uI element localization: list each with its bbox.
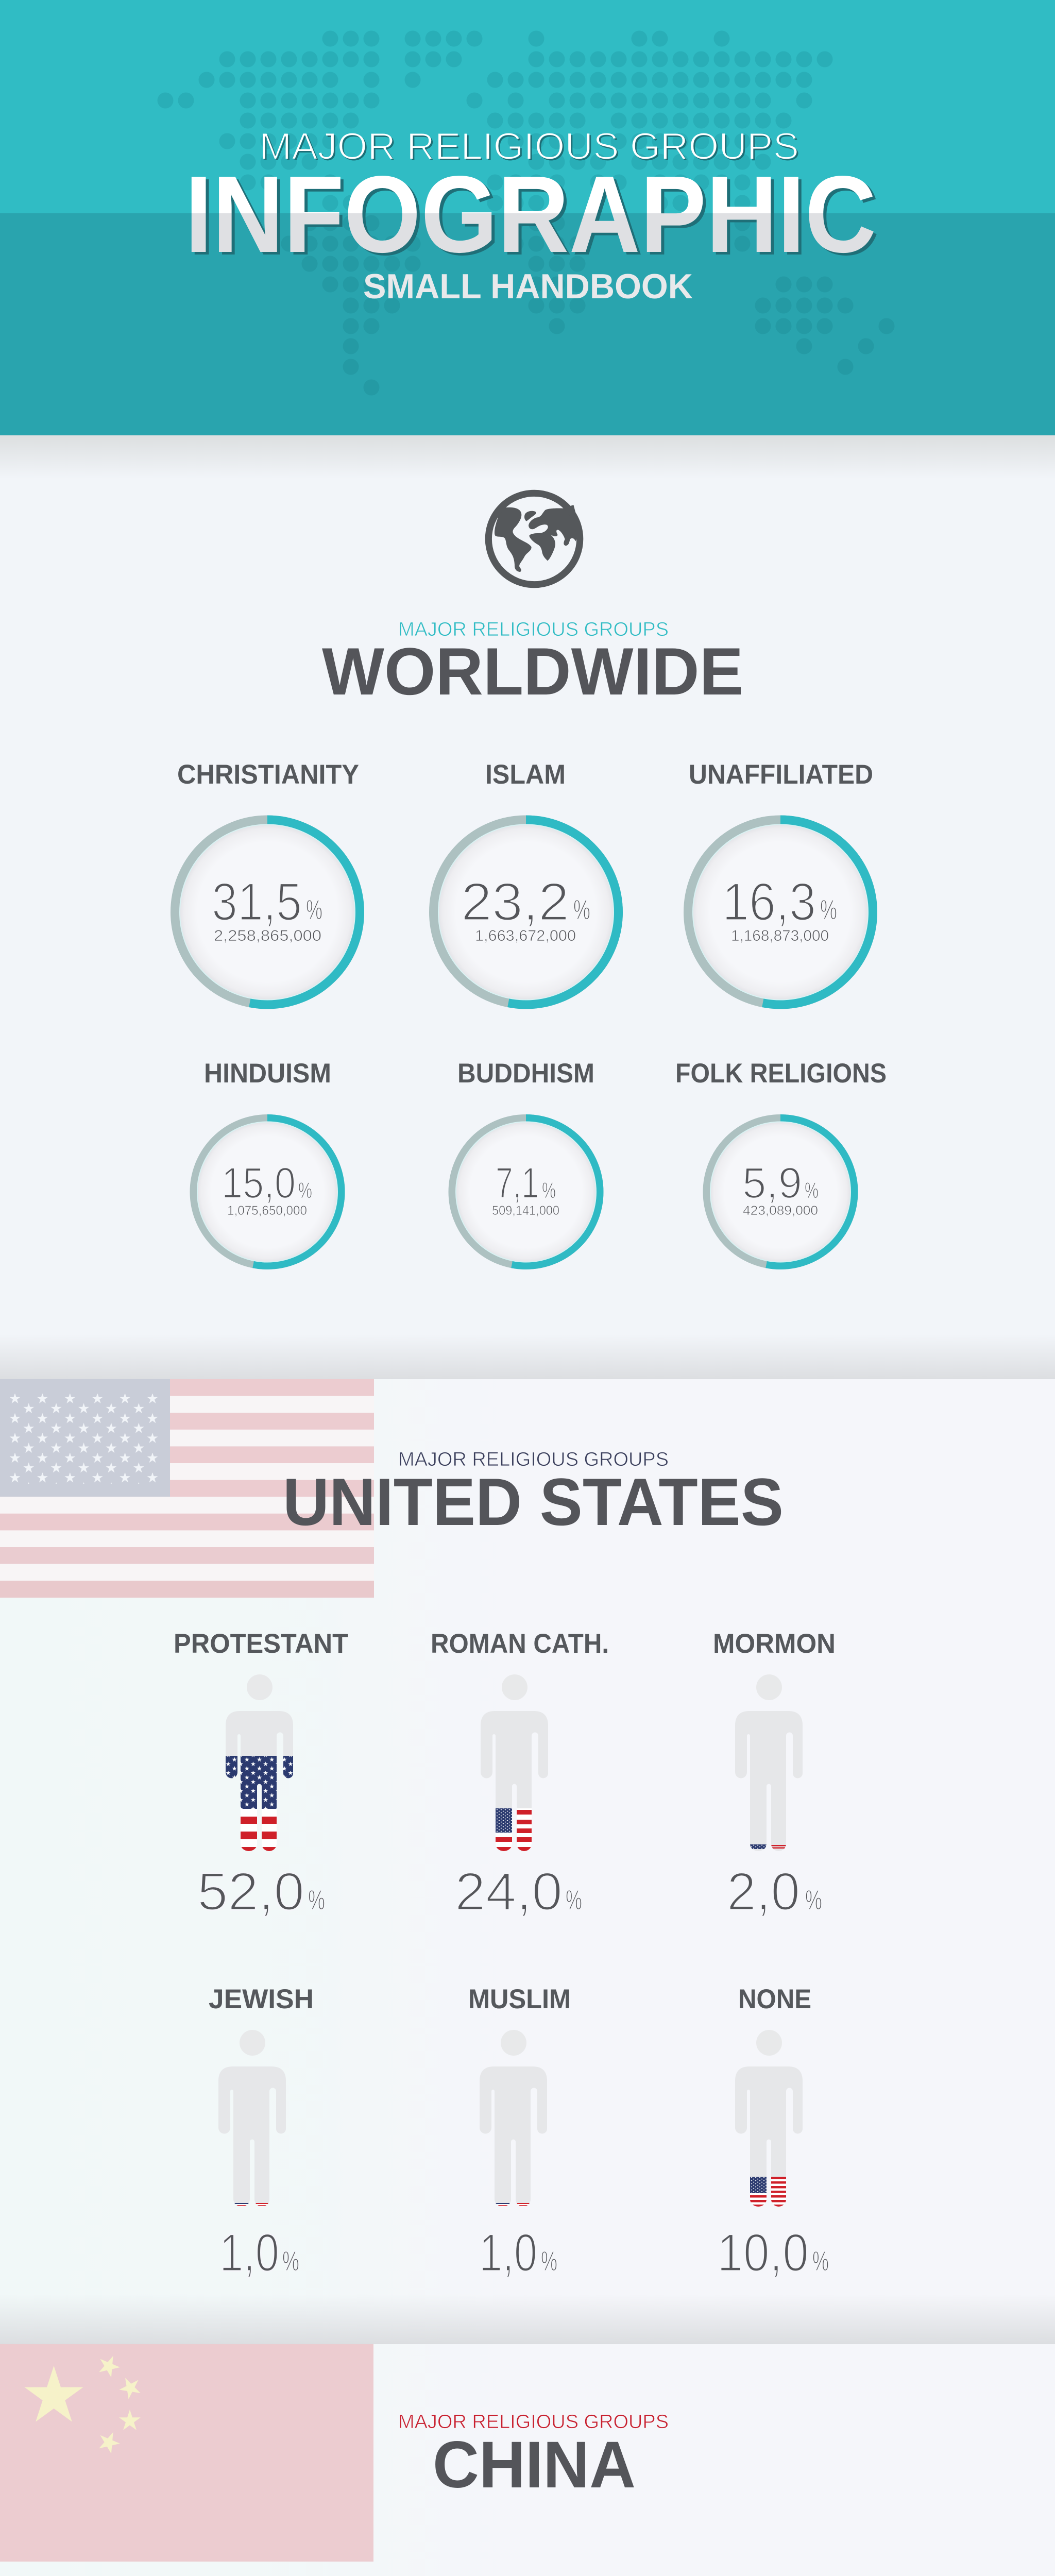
stat: jewish (209, 1984, 314, 2283)
header subtitle: MAJOR RELIGIOUS GROUPS (261, 127, 801, 169)
stat: islam: 23,2 (461, 872, 569, 932)
stat: roman catholic: ROMAN CATH. (431, 1629, 609, 1659)
us heading: UNITED STATES (283, 1464, 784, 1539)
stat: roman catholic: % (566, 1885, 582, 1916)
panel: worldwide (0, 435, 1055, 1379)
stat: jewish: 1,0 (219, 2223, 279, 2283)
figure: 2 percent (735, 1674, 803, 1851)
stat: hinduism (194, 1058, 341, 1265)
stat: christianity: % (306, 894, 322, 925)
stat: roman catholic: 24,0 (455, 1862, 563, 1922)
stat: muslim: 1,0 (479, 2223, 537, 2283)
figure: 1 percent (218, 2030, 286, 2207)
figure: 10 percent (735, 2030, 803, 2207)
stat: hinduism: % (298, 1178, 312, 1203)
stat: unaffiliated: 16,3 (722, 872, 816, 932)
stat: folk religions (675, 1058, 887, 1265)
stat: islam: ISLAM (485, 759, 566, 790)
icon: globe (488, 493, 581, 585)
stat: none: 10,0 (717, 2223, 809, 2283)
stat: protestant: PROTESTANT (174, 1629, 348, 1659)
stat: protestant: % (308, 1885, 325, 1916)
stat: unaffiliated: % (820, 894, 837, 925)
stat: hinduism: 15,0 (222, 1159, 296, 1207)
stat: buddhism (452, 1058, 600, 1265)
panel: header (0, 0, 1055, 435)
stat: buddhism: % (542, 1178, 556, 1203)
stat: folk religions: FOLK RELIGIONS (675, 1058, 887, 1089)
stat: christianity: 31,5 (212, 872, 302, 932)
stat: roman catholic (431, 1629, 609, 1922)
stat: christianity: 2,258,865,000 (214, 927, 321, 944)
stat: buddhism: BUDDHISM (457, 1058, 594, 1089)
figure: 1 percent (480, 2030, 547, 2207)
dotted world map (165, 39, 887, 387)
header subtitle: MAJOR RELIGIOUS GROUPS (259, 126, 799, 167)
stat: buddhism: 509,141,000 (492, 1204, 559, 1218)
stat: none: NONE (738, 1984, 811, 2014)
worldwide heading: WORLDWIDE (322, 634, 743, 709)
stat: christianity: CHRISTIANITY (177, 759, 359, 790)
stat: mormon (713, 1629, 836, 1922)
figure: 24 percent (481, 1674, 548, 1851)
panel: china (0, 2344, 668, 2562)
stat: unaffiliated: 1,168,873,000 (731, 927, 829, 944)
stat: islam: 1,663,672,000 (475, 927, 576, 944)
stat: islam (434, 759, 618, 1005)
stat: christianity (175, 759, 360, 1005)
stat: none (717, 1984, 829, 2283)
stat: folk religions: 5,9 (742, 1159, 802, 1207)
stat: folk religions: 423,089,000 (743, 1204, 818, 1218)
header title: INFOGRAPHIC (188, 156, 879, 278)
stat: protestant: 52,0 (197, 1862, 304, 1922)
stat: hinduism: 1,075,650,000 (227, 1204, 307, 1218)
stat: muslim: MUSLIM (468, 1984, 571, 2014)
stat: muslim: % (541, 2246, 557, 2277)
stat: unaffiliated (688, 759, 873, 1005)
us subtitle: MAJOR RELIGIOUS GROUPS (398, 1449, 669, 1470)
stat: unaffiliated: UNAFFILIATED (689, 759, 873, 790)
stat: hinduism: HINDUISM (204, 1058, 331, 1089)
stat: protestant (174, 1629, 348, 1922)
china heading: CHINA (433, 2428, 636, 2502)
stat: mormon: 2,0 (727, 1862, 800, 1922)
worldwide subtitle: MAJOR RELIGIOUS GROUPS (398, 619, 669, 640)
stat: jewish: JEWISH (209, 1984, 314, 2014)
stat: islam: % (573, 894, 590, 925)
icon: china flag (0, 2344, 373, 2562)
icon: us flag (0, 1379, 374, 1598)
stat: none: % (812, 2246, 829, 2277)
figure: 52 percent (224, 1674, 296, 1851)
stat: folk religions: % (805, 1178, 819, 1203)
stat: mormon: MORMON (713, 1629, 836, 1659)
header title: INFOGRAPHIC (185, 153, 876, 275)
china subtitle: MAJOR RELIGIOUS GROUPS (398, 2411, 669, 2433)
stat: mormon: % (805, 1885, 822, 1916)
stat: jewish: % (282, 2246, 299, 2277)
panel: united states (0, 1379, 1055, 2344)
header tagline: SMALL HANDBOOK (363, 267, 693, 306)
stat: muslim (468, 1984, 571, 2283)
stat: buddhism: 7,1 (496, 1159, 539, 1207)
